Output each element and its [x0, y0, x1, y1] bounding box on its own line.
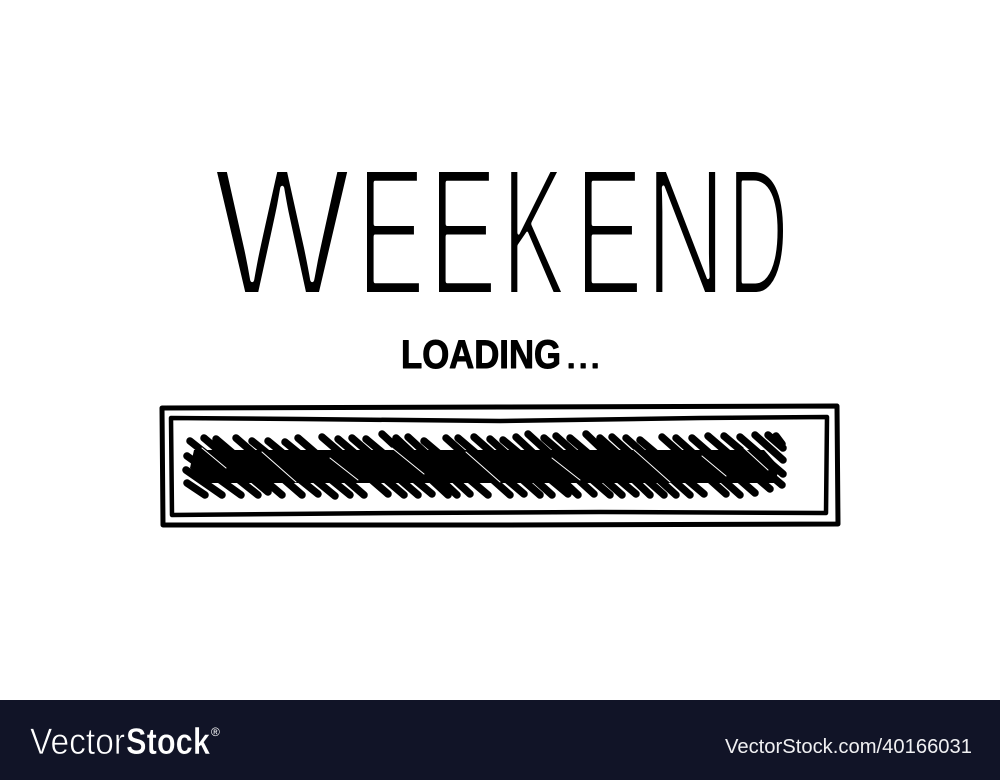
- title: WEEKEND: E: [575, 131, 643, 334]
- bar scribble fill: [186, 434, 783, 496]
- progress bar: [162, 406, 838, 525]
- footer logo: VectorStock: ®: [211, 725, 220, 739]
- bar inner frame: [171, 417, 827, 515]
- footer logo: VectorStock: Stock: [126, 721, 210, 762]
- footer logo: VectorStock: [30, 721, 220, 762]
- footer logo: VectorStock: Vector: [30, 721, 125, 762]
- title: WEEKEND: E: [429, 131, 497, 334]
- title: WEEKEND: E: [357, 131, 425, 334]
- subtitle: LOADING...: ...: [567, 342, 599, 375]
- title: WEEKEND: K: [502, 130, 565, 333]
- title: WEEKEND: [214, 130, 788, 334]
- title: WEEKEND: W: [214, 130, 350, 333]
- bar outer frame: [162, 406, 838, 525]
- title: WEEKEND: D: [728, 130, 788, 333]
- footer bar: [0, 700, 1000, 780]
- footer image id: VectorStock.com/40166031: [725, 736, 972, 758]
- subtitle: LOADING...: LOADING: [401, 333, 561, 377]
- title: WEEKEND: N: [646, 130, 726, 333]
